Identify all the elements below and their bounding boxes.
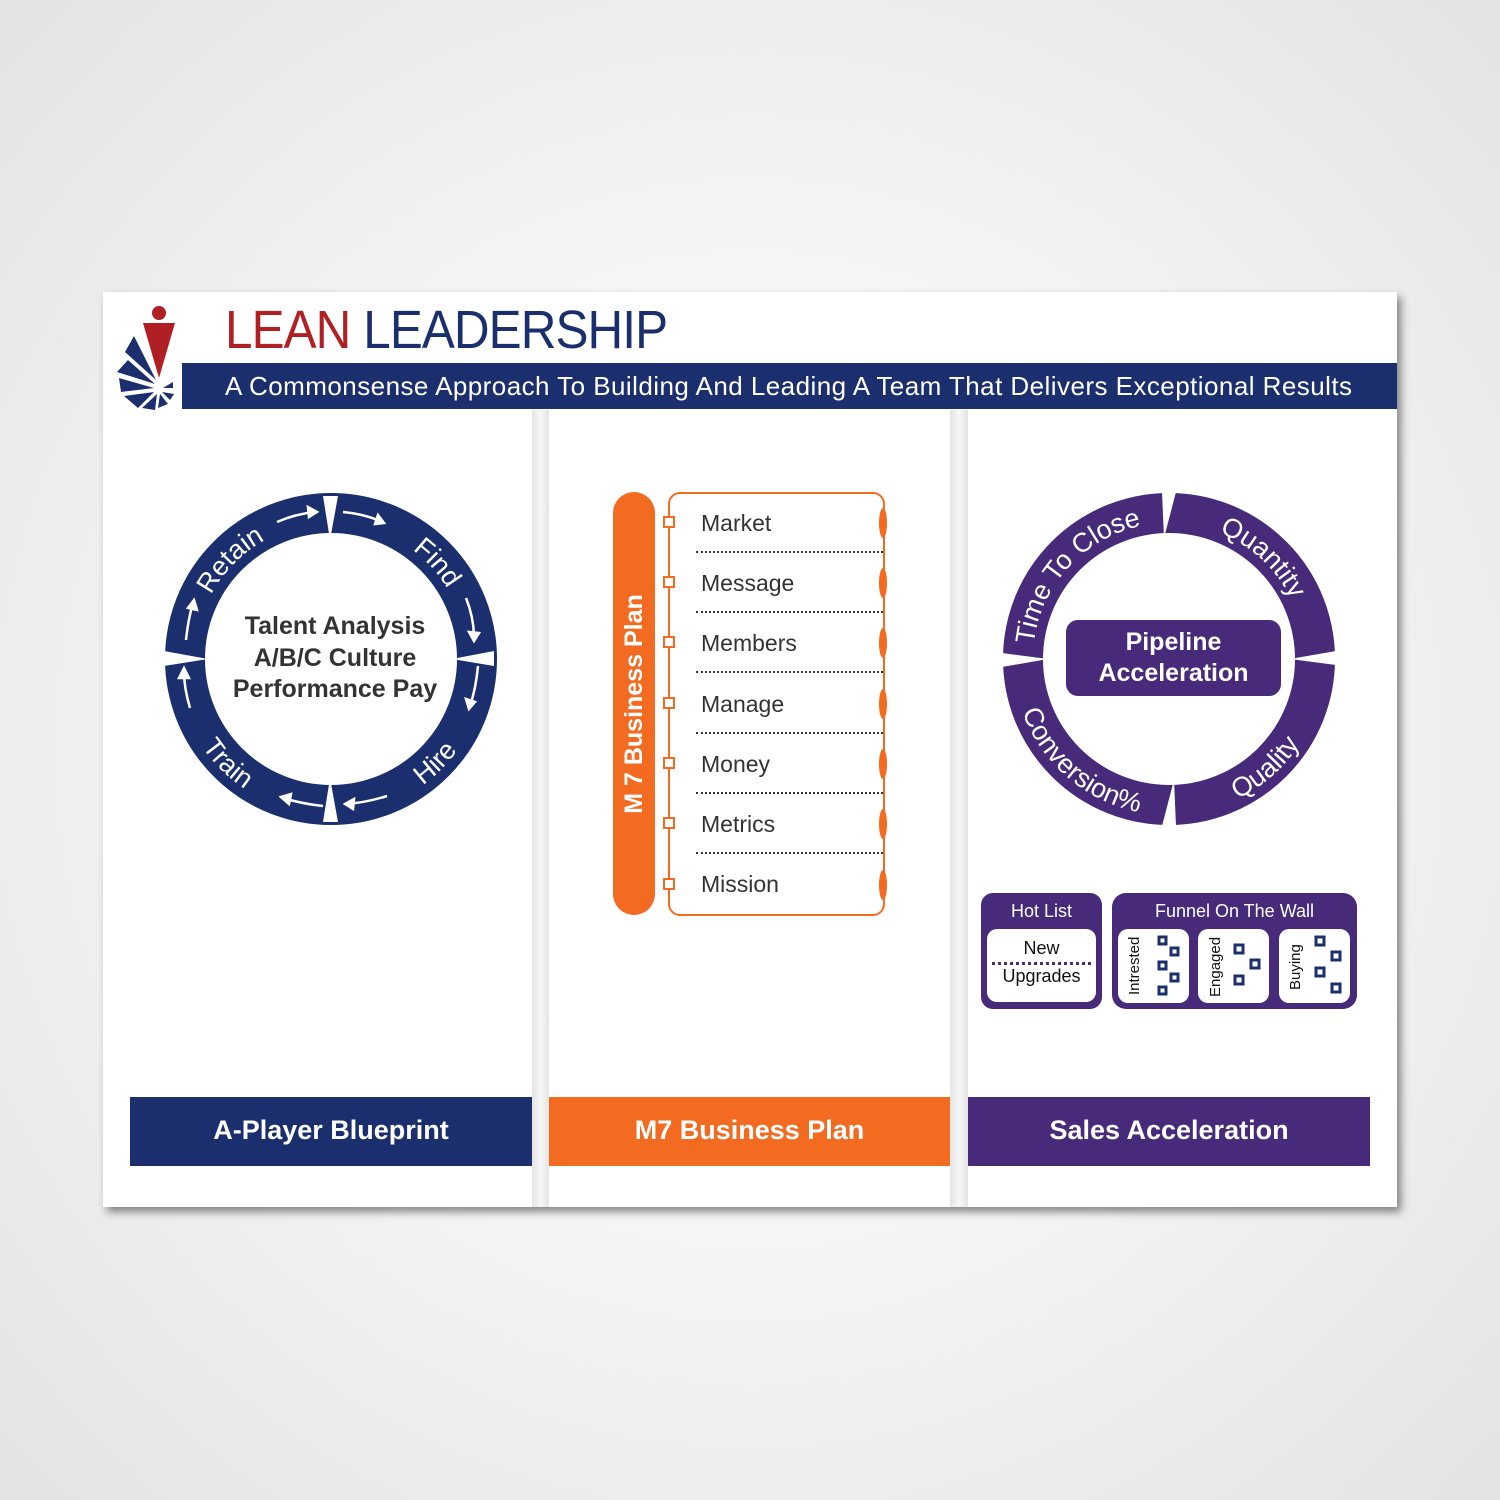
- vertical label: M 7 Business Plan: [620, 594, 648, 814]
- subtitle banner: A Commonsense Approach To Building And Leading A Team That Delivers Exceptional Results: [225, 371, 1352, 401]
- column divider left: [532, 410, 549, 1207]
- panel: A-Player circle: Find: [414, 537, 463, 588]
- panel: A-Player circle: Retain: [196, 530, 264, 593]
- orange vertical pill: [613, 492, 655, 915]
- footer bar: Sales: Sales Acceleration: [1049, 1115, 1289, 1145]
- funnel on the wall: Buying: [1287, 944, 1304, 990]
- panel: A-Player circle: [165, 493, 497, 825]
- title: LEAN LEADERSHIP: [225, 300, 667, 360]
- panel: sales circle: Time To Close: [1015, 513, 1139, 642]
- panel: M7 list: Manage: [701, 691, 784, 717]
- funnel on the wall: [1112, 893, 1357, 1009]
- panel: M7 list: Money: [701, 751, 770, 777]
- text: talent analysis: Performance Pay: [233, 675, 437, 703]
- panel: M7 list: Members: [701, 630, 797, 656]
- list box: [668, 492, 885, 916]
- panel: A-Player circle: Train: [206, 736, 250, 788]
- footer bar: Sales: [968, 1097, 1370, 1166]
- hot list: New: [1023, 938, 1060, 958]
- hot list: Hot List: [1011, 901, 1072, 921]
- funnel on the wall: Funnel On The Wall: [1155, 901, 1314, 921]
- panel: M7 list: Market: [701, 510, 771, 536]
- subtitle banner: [182, 363, 1397, 409]
- pipeline label: Pipeline: [1126, 628, 1221, 656]
- panel: A-Player circle: Hire: [412, 744, 455, 784]
- footer bar: A-Player: [130, 1097, 532, 1166]
- column divider right: [950, 410, 968, 1207]
- logo icon: [117, 306, 175, 410]
- footer bar: M7: [549, 1097, 950, 1166]
- funnel on the wall: Intrested: [1126, 937, 1143, 995]
- panel: sales circle: [1003, 493, 1335, 825]
- card: [103, 292, 1397, 1207]
- text: talent analysis: [233, 612, 437, 703]
- panel: M7 list: Message: [701, 570, 794, 596]
- funnel on the wall: Engaged: [1207, 937, 1224, 997]
- pipeline label: [1066, 620, 1281, 696]
- panel: sales circle: Quality: [1232, 736, 1299, 797]
- footer bar: A-Player: A-Player Blueprint: [213, 1115, 449, 1145]
- panel: M7 list: Metrics: [701, 811, 775, 837]
- hot list: Upgrades: [1002, 966, 1081, 986]
- panel: M7 list: [613, 492, 887, 916]
- text: talent analysis: A/B/C Culture: [254, 644, 416, 672]
- text: talent analysis: Talent Analysis: [245, 612, 425, 640]
- hot list: [981, 893, 1102, 1009]
- panel: sales circle: Quantity: [1223, 518, 1304, 595]
- pipeline label: Acceleration: [1098, 659, 1249, 687]
- panel: sales circle: Conversion%: [1024, 708, 1140, 812]
- panel: M7 list: Mission: [701, 871, 779, 897]
- footer bar: M7: M7 Business Plan: [635, 1115, 864, 1145]
